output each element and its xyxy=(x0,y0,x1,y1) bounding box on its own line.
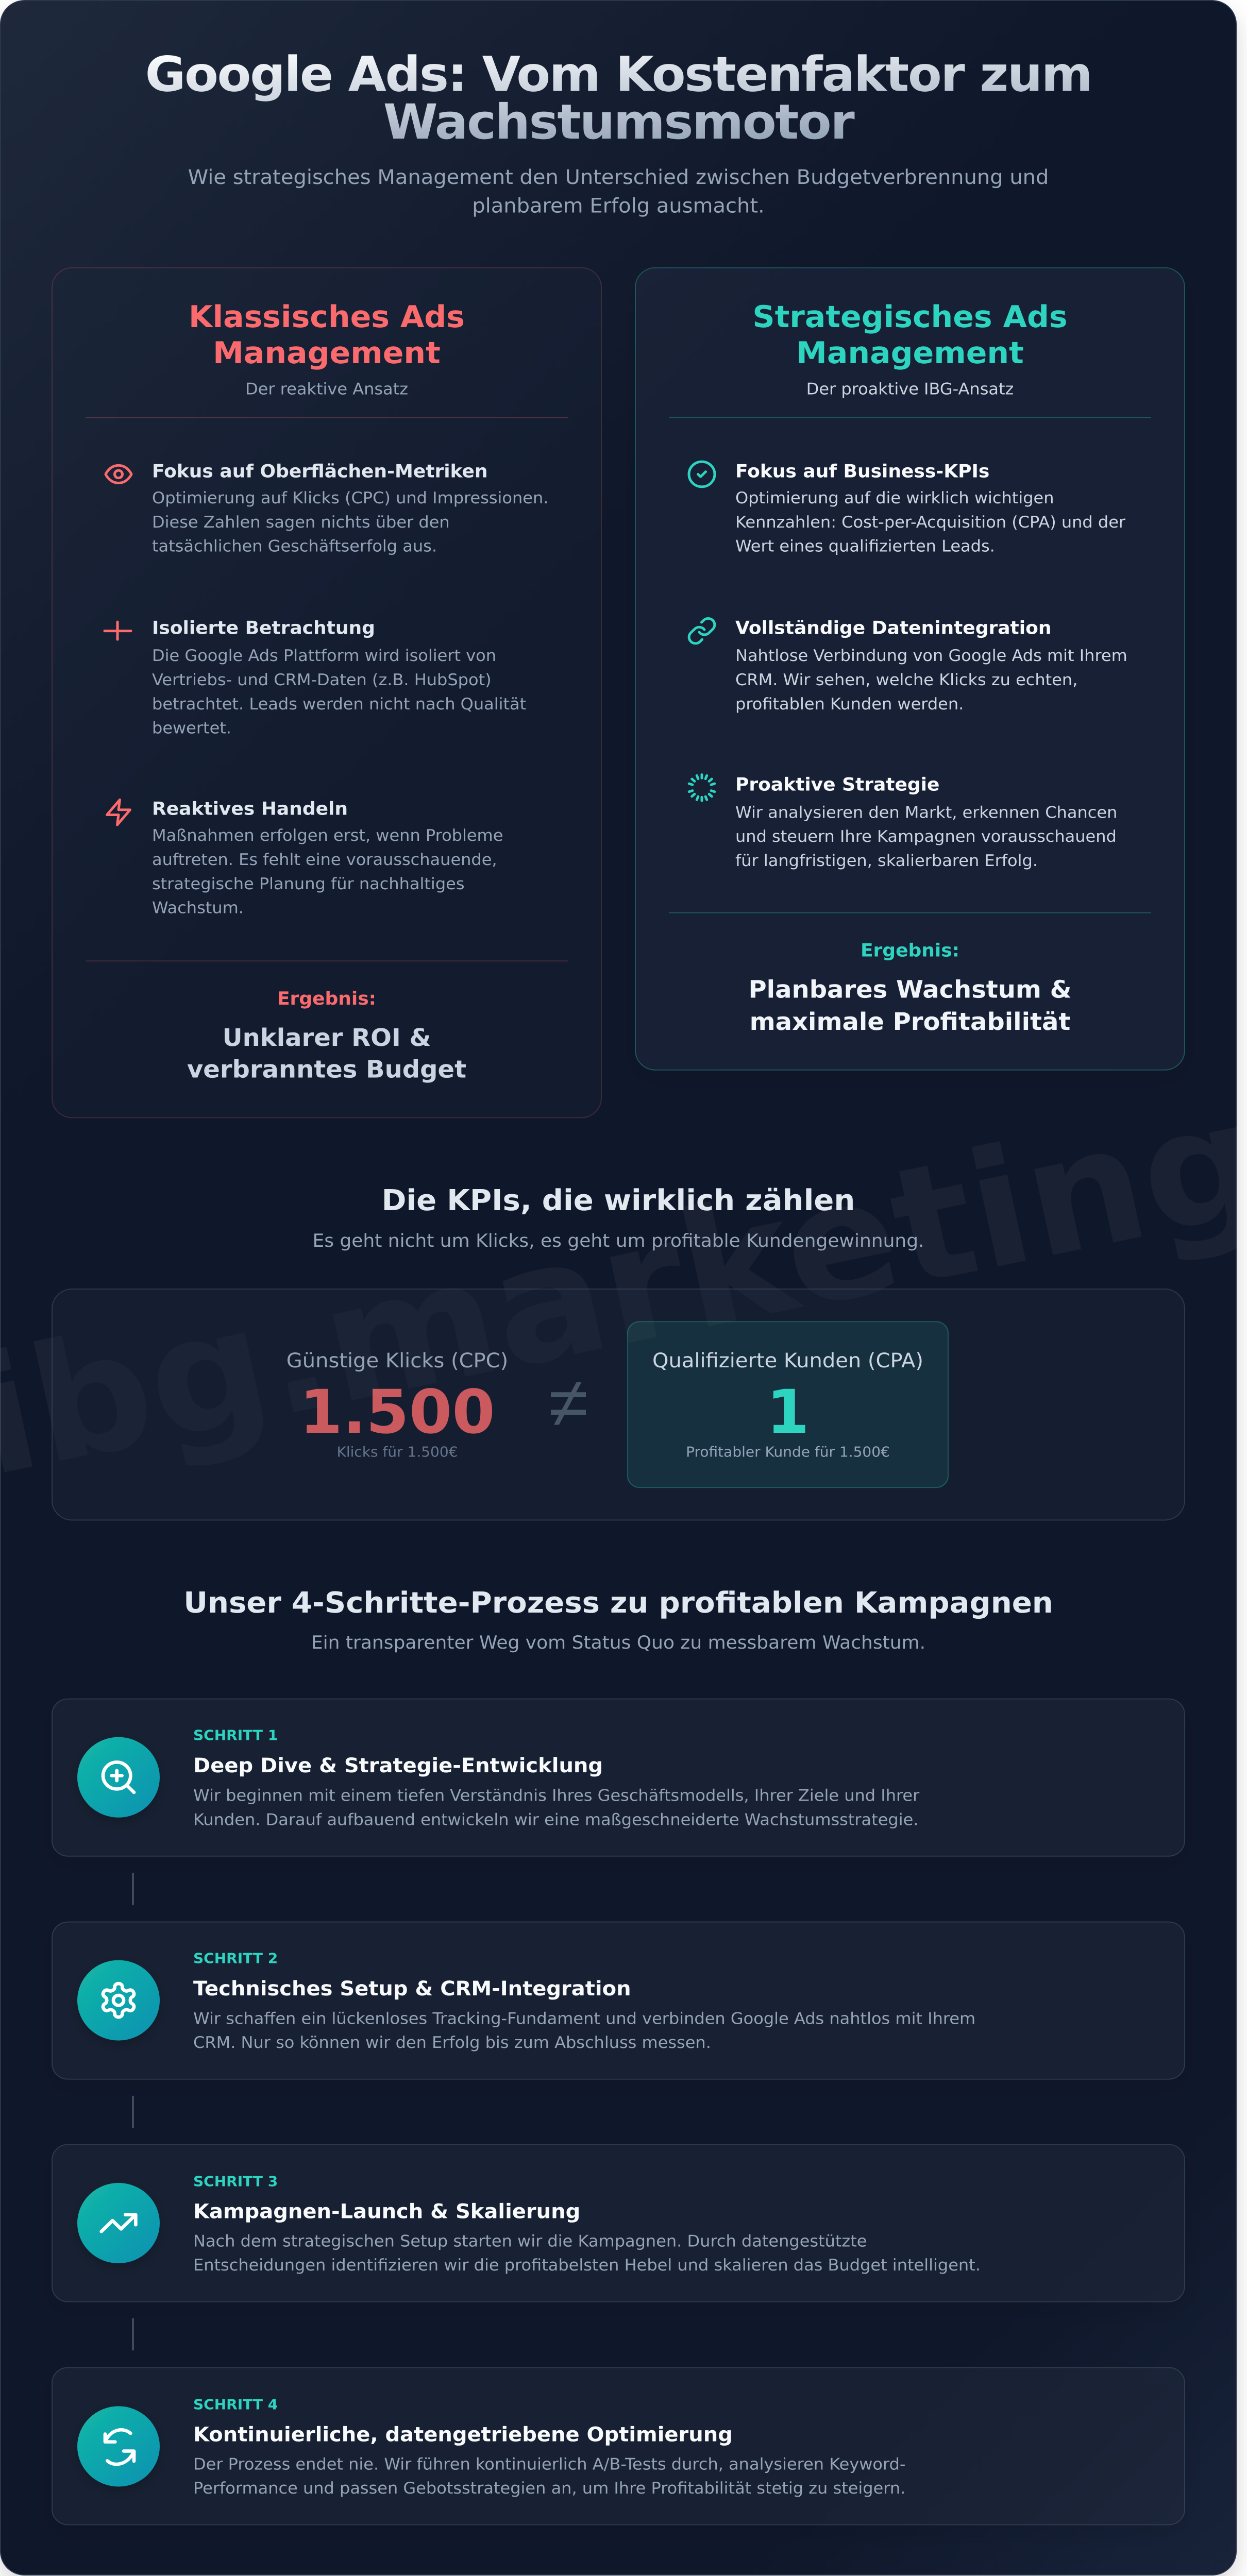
item: Proaktive Strategie: Proaktive Strategie xyxy=(735,775,939,795)
connector 3 xyxy=(132,2318,134,2350)
metric: CPA customers: 1 xyxy=(766,1378,810,1447)
subtitle xyxy=(188,166,1049,217)
panel: step 1: Deep Dive & Strategie-Entwicklung xyxy=(193,1754,603,1777)
result: Unklarer ROI: verbranntes Budget xyxy=(187,1056,466,1083)
icon: lightning bolt xyxy=(106,799,131,826)
panel: Klassisches Ads Management xyxy=(52,268,601,1117)
metric: CPC clicks: 1.500 xyxy=(299,1378,495,1447)
metric: CPA customers: Qualifizierte Kunden (CPA) xyxy=(652,1349,923,1372)
item: Isolierte Betrachtung: Die Google Ads Plattform wird isoliert von xyxy=(152,646,496,665)
title xyxy=(145,46,1091,150)
title: Google Ads: Vom Kostenfaktor zum xyxy=(145,46,1091,103)
connector 2 xyxy=(132,2096,134,2128)
icon: trending up xyxy=(77,2183,160,2263)
subtitle: Wie strategisches Management den Unterschied zwischen Budgetverbrennung und xyxy=(188,166,1049,189)
item: Isolierte Betrachtung: betrachtet. Leads werden nicht nach Qualität xyxy=(152,694,526,714)
item: Isolierte Betrachtung: Isolierte Betrachtung xyxy=(152,618,375,638)
item: Vollständige Datenintegration xyxy=(689,618,1127,714)
text: process subtitle: Ein transparenter Weg vom Status Quo zu messbarem Wachstum. xyxy=(311,1633,925,1653)
item: Reaktives Handeln: auftreten. Es fehlt eine vorausschauende, xyxy=(152,850,497,869)
icon: eye xyxy=(104,464,133,484)
metric: CPC clicks: Klicks für 1.500€ xyxy=(336,1444,458,1460)
item: Isolierte Betrachtung: bewertet. xyxy=(152,718,231,737)
panel: Strategisches Ads Management xyxy=(635,268,1185,1070)
metric: CPA customers xyxy=(628,1321,948,1487)
connector 1 xyxy=(132,1873,134,1905)
panel: step 4: Kontinuierliche, datengetriebene Optimierung xyxy=(193,2424,733,2446)
item: Vollständige Datenintegration: CRM. Wir sehen, welche Klicks zu echten, xyxy=(735,670,1077,689)
symbol: not equal: ≠ xyxy=(549,1363,588,1442)
item: Fokus auf Oberflächen-Metriken: Optimierung auf Klicks (CPC) und Impressionen. xyxy=(152,488,548,507)
panel: step 4: Performance und passen Gebotsstrategien an, um Ihre Profitabilität stetig zu steigern. xyxy=(193,2479,905,2498)
text: KPI subtitle: Es geht nicht um Klicks, es geht um profitable Kundengewinnung. xyxy=(312,1231,924,1251)
metric: CPC clicks xyxy=(287,1349,508,1460)
item: Proaktive Strategie xyxy=(689,775,1117,870)
icon: radial dashes xyxy=(689,775,715,801)
panel: step 4: Der Prozess endet nie. Wir führen kontinuierlich A/B-Tests durch, analysieren Keyword- xyxy=(193,2454,905,2473)
panel: step 3: Entscheidungen identifizieren wir die profitabelsten Hebel und skalieren das Budget intelligent. xyxy=(193,2256,981,2275)
panel: step 1: Wir beginnen mit einem tiefen Verständnis Ihres Geschäftsmodells, Ihrer Ziele und Ihrer xyxy=(193,1786,920,1805)
panel: step 3: SCHRITT 3 xyxy=(193,2173,278,2190)
panel: step 4 xyxy=(52,2367,1185,2525)
panel: step 3: Kampagnen-Launch & Skalierung xyxy=(193,2200,580,2223)
panel: step 2: Wir schaffen ein lückenloses Tracking-Fundament und verbinden Google Ads nahtlos mit Ihrem xyxy=(193,2009,975,2028)
subtitle: planbarem Erfolg ausmacht. xyxy=(472,194,765,217)
subheading: Der proaktive IBG-Ansatz: Der proaktive IBG-Ansatz xyxy=(806,379,1014,398)
item: Vollständige Datenintegration: Nahtlose Verbindung von Google Ads mit Ihrem xyxy=(735,646,1127,665)
panel: step 1: SCHRITT 1 xyxy=(193,1727,278,1743)
item: Fokus auf Oberflächen-Metriken xyxy=(106,461,548,555)
panel: step 3 xyxy=(52,2144,1185,2302)
item: Fokus auf Oberflächen-Metriken: Diese Zahlen sagen nichts über den xyxy=(152,513,450,532)
panel: step 2: SCHRITT 2 xyxy=(193,1950,278,1967)
item: Reaktives Handeln: Maßnahmen erfolgen erst, wenn Probleme xyxy=(152,826,503,845)
result label: Ergebnis: Ergebnis: xyxy=(861,940,959,961)
icon: check circle xyxy=(687,461,716,488)
panel: step 2 xyxy=(52,1922,1185,2079)
heading: KPIs: Die KPIs, die wirklich zählen xyxy=(382,1183,855,1217)
panel: step 2: CRM. Nur so können wir den Erfolg bis zum Abschluss messen. xyxy=(193,2033,711,2052)
item: Reaktives Handeln: Reaktives Handeln xyxy=(152,799,348,819)
item: Reaktives Handeln: Wachstum. xyxy=(152,898,244,917)
item: Fokus auf Business-KPIs: Kennzahlen: Cost-per-Acquisition (CPA) und der xyxy=(735,513,1126,532)
item: Vollständige Datenintegration: profitablen Kunden werden. xyxy=(735,694,964,714)
icon: broken link cross xyxy=(105,622,131,639)
item: Fokus auf Business-KPIs: Wert eines qualifizierten Leads. xyxy=(735,536,995,555)
item: Reaktives Handeln xyxy=(107,799,503,917)
item: Reaktives Handeln: strategische Planung für nachhaltiges xyxy=(152,874,464,893)
panel: step 1 xyxy=(52,1699,1185,1856)
item: Fokus auf Business-KPIs: Optimierung auf die wirklich wichtigen xyxy=(735,488,1054,507)
item: Vollständige Datenintegration: Vollständige Datenintegration xyxy=(735,618,1051,638)
subheading: Der reaktive Ansatz: Der reaktive Ansatz xyxy=(245,379,408,398)
heading: Strategisches Ads Management: Management xyxy=(796,335,1024,371)
item: Proaktive Strategie: für langfristigen, skalierbaren Erfolg. xyxy=(735,851,1038,870)
icon: zoom in xyxy=(77,1737,160,1818)
item: Isolierte Betrachtung xyxy=(105,618,526,737)
heading: process: Unser 4-Schritte-Prozess zu profitablen Kampagnen xyxy=(183,1586,1053,1620)
metric: CPC clicks: Günstige Klicks (CPC) xyxy=(287,1349,508,1372)
metric: CPA customers: Profitabler Kunde für 1.500€ xyxy=(686,1444,890,1460)
panel: step 2: Technisches Setup & CRM-Integration xyxy=(193,1977,631,2001)
heading: Klassisches Ads Management: Klassisches Ads xyxy=(189,299,465,334)
item: Proaktive Strategie: Wir analysieren den Markt, erkennen Chancen xyxy=(735,803,1117,822)
title: Wachstumsmotor xyxy=(383,94,855,150)
item: Fokus auf Business-KPIs: Fokus auf Business-KPIs xyxy=(735,461,989,482)
panel: KPI comparison xyxy=(52,1289,1185,1520)
heading: Klassisches Ads Management: Management xyxy=(213,335,441,371)
icon: gear xyxy=(77,1960,160,2041)
icon: link xyxy=(687,617,716,645)
item: Fokus auf Oberflächen-Metriken: tatsächlichen Geschäftserfolg aus. xyxy=(152,536,437,555)
panel: step 3: Nach dem strategischen Setup starten wir die Kampagnen. Durch datengestützte xyxy=(193,2231,867,2250)
heading: Strategisches Ads Management: Strategisches Ads xyxy=(752,299,1068,334)
result: Planbares Wachstum: maximale Profitabilität xyxy=(750,1008,1070,1036)
item: Proaktive Strategie: und steuern Ihre Kampagnen vorausschauend xyxy=(735,827,1117,846)
result: Planbares Wachstum: Planbares Wachstum & xyxy=(749,976,1071,1004)
icon: refresh xyxy=(77,2406,160,2486)
item: Isolierte Betrachtung: Vertriebs- und CRM-Daten (z.B. HubSpot) xyxy=(152,670,492,689)
item: Fokus auf Oberflächen-Metriken: Fokus auf Oberflächen-Metriken xyxy=(152,461,488,482)
item: Fokus auf Business-KPIs xyxy=(689,461,1126,555)
panel: step 4: SCHRITT 4 xyxy=(193,2396,278,2413)
result label: Ergebnis: Ergebnis: xyxy=(277,989,376,1009)
panel: step 1: Kunden. Darauf aufbauend entwickeln wir eine maßgeschneiderte Wachstumsstrategie. xyxy=(193,1810,918,1829)
result: Unklarer ROI: Unklarer ROI & xyxy=(223,1024,431,1052)
